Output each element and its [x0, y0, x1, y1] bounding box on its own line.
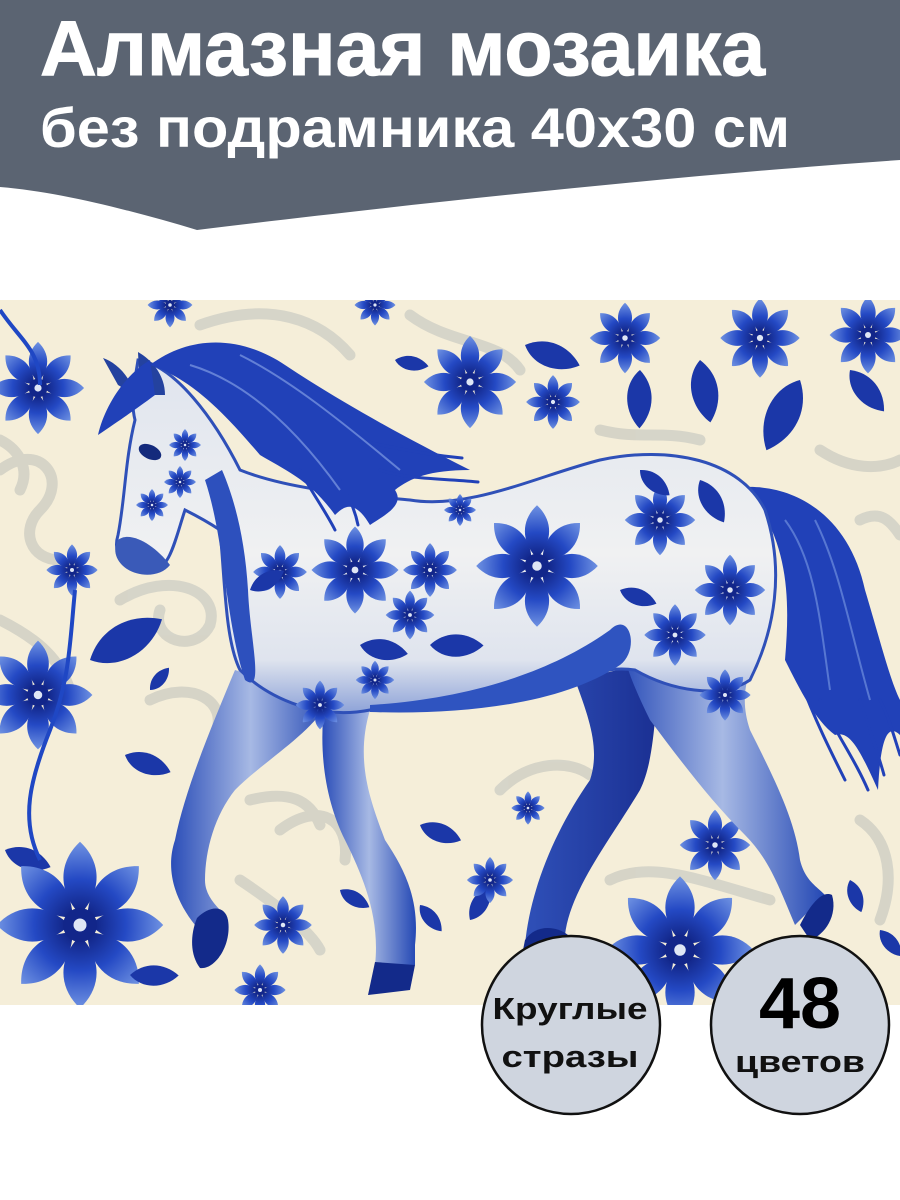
far hind leg [525, 660, 660, 945]
forelock [98, 360, 155, 435]
background grey swirls [0, 314, 900, 950]
mane [150, 342, 478, 530]
hoof: near front [192, 908, 229, 968]
header banner [0, 0, 900, 230]
near hind leg [628, 670, 825, 925]
badge: 48 colours: 48 [759, 964, 841, 1044]
badge: 48 colours: цветов [735, 1044, 865, 1079]
title: Алмазная мозаика [40, 4, 766, 92]
neck shading [205, 470, 255, 683]
horse tail [745, 487, 900, 790]
body floral pattern [136, 429, 765, 729]
artwork: horse with floral pattern [0, 283, 900, 1024]
bottom flowers [254, 791, 900, 1024]
muzzle [115, 537, 170, 575]
hoof: far front [368, 962, 415, 995]
hoof: far hind [523, 928, 568, 948]
badge: round rhinestones [482, 936, 660, 1114]
badge: round rhinestones: стразы [502, 1039, 638, 1074]
eye [138, 444, 162, 460]
subtitle: без подрамника 40х30 см [40, 96, 790, 159]
horse body and neck [117, 360, 776, 713]
badge: 48 colours [711, 936, 889, 1114]
near front leg [171, 670, 330, 925]
ears [103, 352, 165, 395]
left flowers [0, 310, 286, 1016]
top right flowers [148, 283, 900, 456]
badge: round rhinestones: Круглые [492, 991, 648, 1026]
hoof: near hind [800, 894, 833, 940]
far front leg [322, 700, 416, 965]
belly shading [370, 625, 631, 712]
